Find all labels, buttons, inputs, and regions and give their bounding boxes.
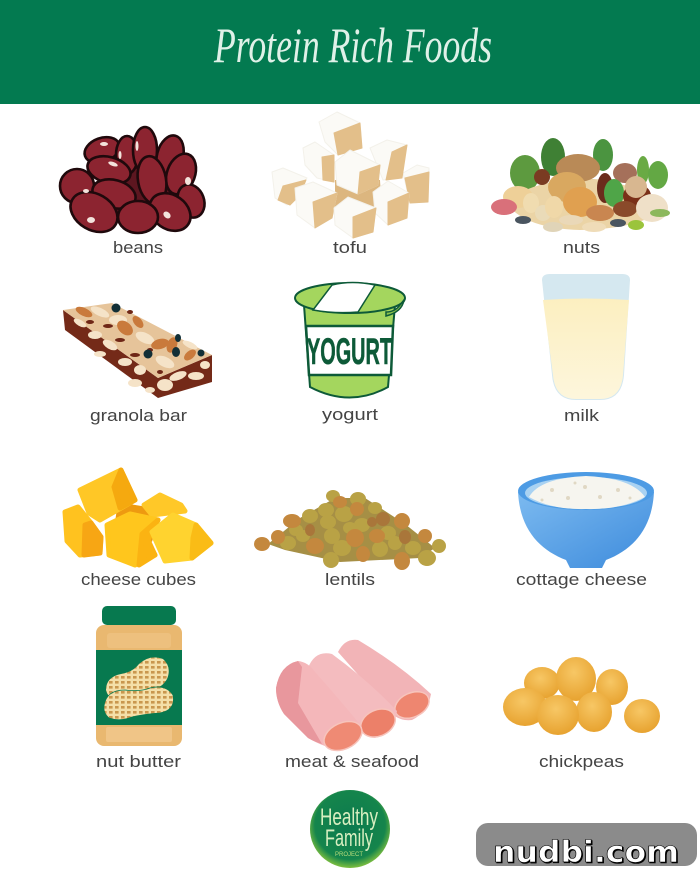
icon: lentils pile — [254, 490, 446, 570]
title: Protein Rich Foods — [213, 17, 492, 73]
food item: cheese cubes — [65, 470, 211, 589]
icon: beans — [60, 127, 209, 240]
food item: milk — [542, 274, 630, 425]
label: yogurt: yogurt — [322, 405, 378, 424]
label: nuts: nuts — [563, 238, 600, 257]
food item: yogurt — [295, 282, 405, 424]
icon: blue bowl — [518, 472, 654, 568]
icon: chickpeas — [503, 657, 660, 735]
watermark: nudbi.com — [493, 835, 679, 869]
header band — [0, 0, 700, 104]
icon: glass of milk — [542, 274, 630, 400]
logo: Healthy Family Project — [310, 790, 390, 868]
yogurt wordmark: YOGURT — [307, 331, 392, 372]
food item: nut butter — [96, 606, 182, 771]
label: nut butter: nut butter — [96, 752, 181, 771]
icon: tofu cubes — [272, 112, 429, 238]
food item: chickpeas — [503, 657, 660, 771]
icon: ham rolls — [276, 640, 433, 756]
food item: lentils — [254, 490, 446, 589]
logo: Healthy Family Project: Family — [325, 825, 373, 852]
label: cheese cubes: cheese cubes — [81, 570, 196, 589]
watermark — [476, 823, 697, 869]
label: chickpeas: chickpeas — [539, 752, 624, 771]
label: meat & seafood: meat & seafood — [285, 752, 419, 771]
food item: granola bar — [63, 303, 212, 425]
label: beans: beans — [113, 238, 163, 257]
label: lentils: lentils — [325, 570, 375, 589]
logo: Healthy Family Project: Healthy — [320, 804, 378, 831]
label: cottage cheese: cottage cheese — [516, 570, 647, 589]
label: granola bar: granola bar — [90, 406, 187, 425]
icon: yogurt cup — [295, 282, 405, 398]
icon: peanut butter jar — [96, 606, 182, 746]
icon: granola bar — [63, 303, 212, 398]
label: milk: milk — [564, 406, 600, 425]
food item: beans — [60, 127, 209, 257]
icon: nuts — [491, 138, 670, 232]
label: tofu: tofu — [333, 238, 367, 257]
food item: cottage cheese — [516, 472, 654, 589]
icon: cheese cubes — [65, 470, 211, 565]
food item: nuts — [491, 138, 670, 257]
peanut — [106, 657, 169, 698]
logo: Healthy Family Project: PROJECT — [335, 852, 363, 858]
food item: meat and seafood — [276, 640, 433, 771]
food item: tofu — [272, 112, 429, 257]
